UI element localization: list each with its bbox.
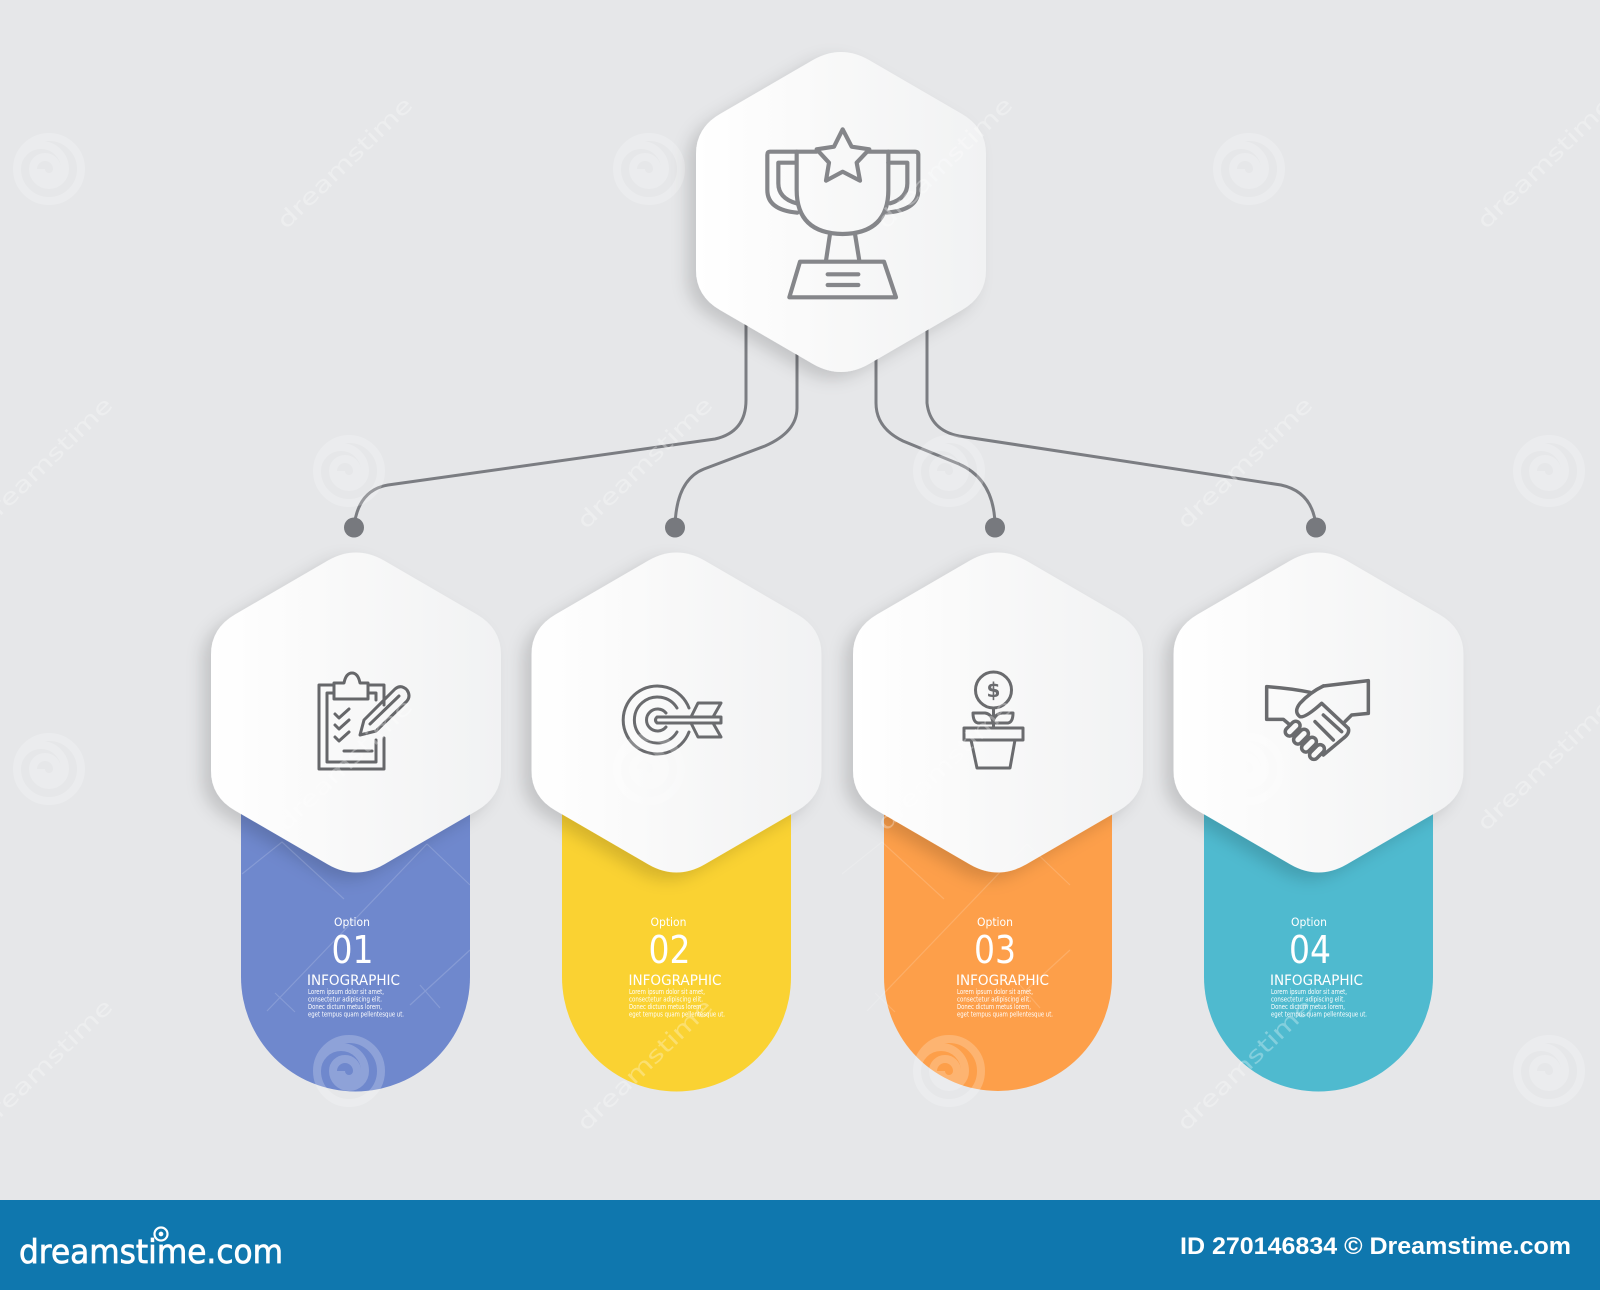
icon: target and arrow: [623, 686, 721, 754]
text: option 02: Option: [650, 915, 686, 929]
text: option 01: Option: [334, 915, 370, 929]
hexagon 1: [211, 552, 501, 872]
text: option 04: Option: [1291, 915, 1327, 929]
text: option 02: Donec dictum metus lorem,: [629, 1003, 703, 1011]
pill: teal: [1204, 800, 1433, 1092]
text: option 01: [307, 915, 404, 1018]
watermark: text: dreamstime: [1173, 995, 1318, 1136]
text: option 04: consectetur adipiscing elit.: [1271, 996, 1345, 1004]
footer bar: [0, 1200, 1600, 1290]
panel: option 03: [853, 552, 1143, 1091]
panel: option 02: [532, 552, 822, 1092]
icon: money plant: [964, 672, 1023, 768]
text: option 01: Lorem ipsum dolor sit amet,: [308, 988, 384, 996]
watermark: text: dreamstime: [1173, 393, 1318, 534]
text: option 03: eget tempus quam pellentesque ut.: [957, 1010, 1053, 1018]
text: option 02: 02: [648, 928, 690, 972]
pill: orange: [884, 800, 1112, 1091]
watermark: text: dreamstime: [273, 695, 418, 836]
watermark: spirals: [17, 137, 1581, 1103]
text: option 04: [1270, 915, 1367, 1018]
icon: clipboard and pencil: [319, 673, 409, 769]
text: option 02: consectetur adipiscing elit.: [629, 996, 703, 1004]
watermark: text: dreamstime: [873, 93, 1018, 234]
footer credit: ID 270146834 © Dreamstime.com: [1180, 1233, 1571, 1260]
text: option 03: consectetur adipiscing elit.: [957, 996, 1031, 1004]
connector dots: [344, 518, 1326, 538]
footer logo: dreamstime.com: [19, 1232, 283, 1271]
text: option 01: eget tempus quam pellentesque ut.: [308, 1010, 404, 1018]
text: option 01: consectetur adipiscing elit.: [308, 996, 382, 1004]
text: option 03: INFOGRAPHIC: [956, 973, 1049, 989]
text: option 03: [956, 915, 1053, 1018]
text: option 03: Donec dictum metus lorem,: [957, 1003, 1031, 1011]
text: option 03: Lorem ipsum dolor sit amet,: [957, 988, 1033, 996]
hexagon 3: [853, 552, 1143, 872]
icon: money plant: $: [987, 678, 1000, 702]
text: option 04: eget tempus quam pellentesque ut.: [1271, 1010, 1367, 1018]
hexagon 2: [532, 552, 822, 872]
text: option 02: Lorem ipsum dolor sit amet,: [629, 988, 705, 996]
watermark: text: dreamstime: [573, 393, 718, 534]
watermark: text: dreamstime: [1473, 695, 1600, 836]
icon: handshake: [1267, 681, 1368, 761]
text: option 04: Donec dictum metus lorem,: [1271, 1003, 1345, 1011]
watermark: text: dreamstime: [573, 995, 718, 1136]
panel: option 01: [211, 552, 501, 1092]
text: option 02: [628, 915, 725, 1018]
top hexagon: [696, 52, 986, 372]
text: option 03: Option: [977, 915, 1013, 929]
watermark: text: dreamstime: [273, 93, 418, 234]
icon: trophy: [767, 129, 918, 297]
watermark: diagonal lines on pills: [242, 842, 1070, 1012]
text: option 04: 04: [1289, 928, 1331, 972]
watermark: text: dreamstime: [1473, 93, 1600, 234]
text: option 01: INFOGRAPHIC: [307, 973, 400, 989]
panel: option 04: [1174, 552, 1464, 1092]
text: option 02: INFOGRAPHIC: [628, 973, 722, 989]
text: option 04: INFOGRAPHIC: [1270, 973, 1363, 989]
text: option 01: Donec dictum metus lorem,: [308, 1003, 382, 1011]
pill: yellow: [562, 800, 791, 1092]
hexagon 4: [1174, 552, 1464, 872]
text: option 04: Lorem ipsum dolor sit amet,: [1271, 988, 1347, 996]
text: option 03: 03: [974, 928, 1016, 972]
watermark: text: dreamstime: [873, 695, 1018, 836]
connector lines: [354, 320, 1316, 527]
pill: blue: [241, 800, 470, 1092]
text: option 01: 01: [332, 928, 374, 972]
text: option 02: eget tempus quam pellentesque ut.: [629, 1010, 725, 1018]
